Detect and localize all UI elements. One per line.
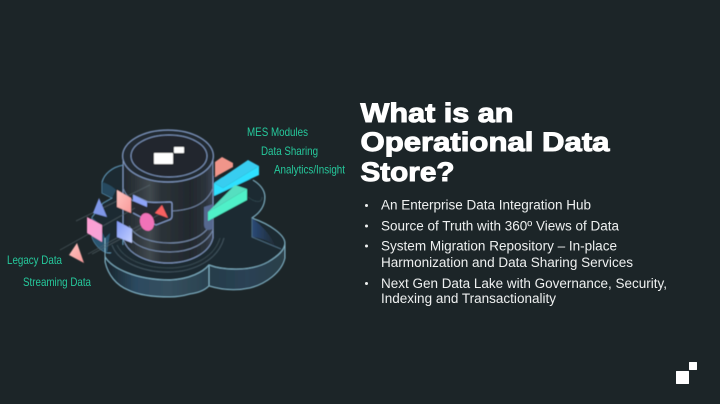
bullet 2: Source of Truth with 360º Views of Data [381, 218, 620, 234]
cylinder top [122, 130, 214, 182]
shape: blue rectangle rear [133, 195, 147, 207]
shape: blue square [117, 221, 132, 243]
bar: salmon [215, 157, 233, 177]
labels [7, 125, 346, 289]
shape: blue cone [93, 198, 107, 217]
top surface [105, 175, 285, 280]
icon: logo on cylinder [154, 147, 184, 164]
back left lobe [92, 165, 123, 253]
bullet 4: Next Gen Data Lake with Governance, Security, [381, 276, 667, 291]
title: Operational Data [360, 127, 611, 157]
bullet 3 [365, 238, 633, 270]
bullet 4 [365, 276, 667, 306]
title: Store? [360, 157, 454, 187]
label: Streaming Data: Streaming Data [23, 275, 91, 289]
bullet 1: An Enterprise Data Integration Hub [381, 198, 591, 212]
side bracket [204, 204, 213, 230]
title [360, 98, 611, 187]
bullet 3: Harmonization and Data Sharing Services [381, 255, 633, 270]
label: MES Modules: MES Modules [247, 125, 308, 139]
cylinder tier lines [123, 188, 213, 252]
label: Data Sharing: Data Sharing [261, 144, 318, 158]
label: Analytics/Insight: Analytics/Insight [274, 162, 346, 176]
platform rings [112, 238, 224, 272]
icon: corner logo [676, 362, 697, 384]
right lobe wall [209, 243, 285, 290]
bullet list [365, 198, 667, 306]
illustration: data store cylinder [60, 130, 285, 297]
shape: magenta square [87, 217, 102, 242]
shape: pink cone [69, 243, 84, 263]
connection lines [60, 185, 160, 254]
bar: green [208, 185, 247, 221]
bullet 4: Indexing and Transactionality [381, 291, 556, 306]
label: Legacy Data: Legacy Data [7, 253, 62, 267]
shape: pink square [117, 190, 131, 213]
slot band [133, 195, 172, 225]
title: What is an [360, 98, 514, 128]
shape: red triangle [155, 205, 168, 218]
shape: magenta circle [138, 211, 156, 233]
front lobe wall [105, 257, 209, 297]
back right lobe outline [252, 180, 285, 243]
bar: cyan [214, 160, 259, 196]
base platform [92, 165, 285, 297]
bullet 3: System Migration Repository – In-place [381, 238, 617, 254]
notch wall [252, 218, 276, 248]
cylinder body [123, 156, 213, 263]
